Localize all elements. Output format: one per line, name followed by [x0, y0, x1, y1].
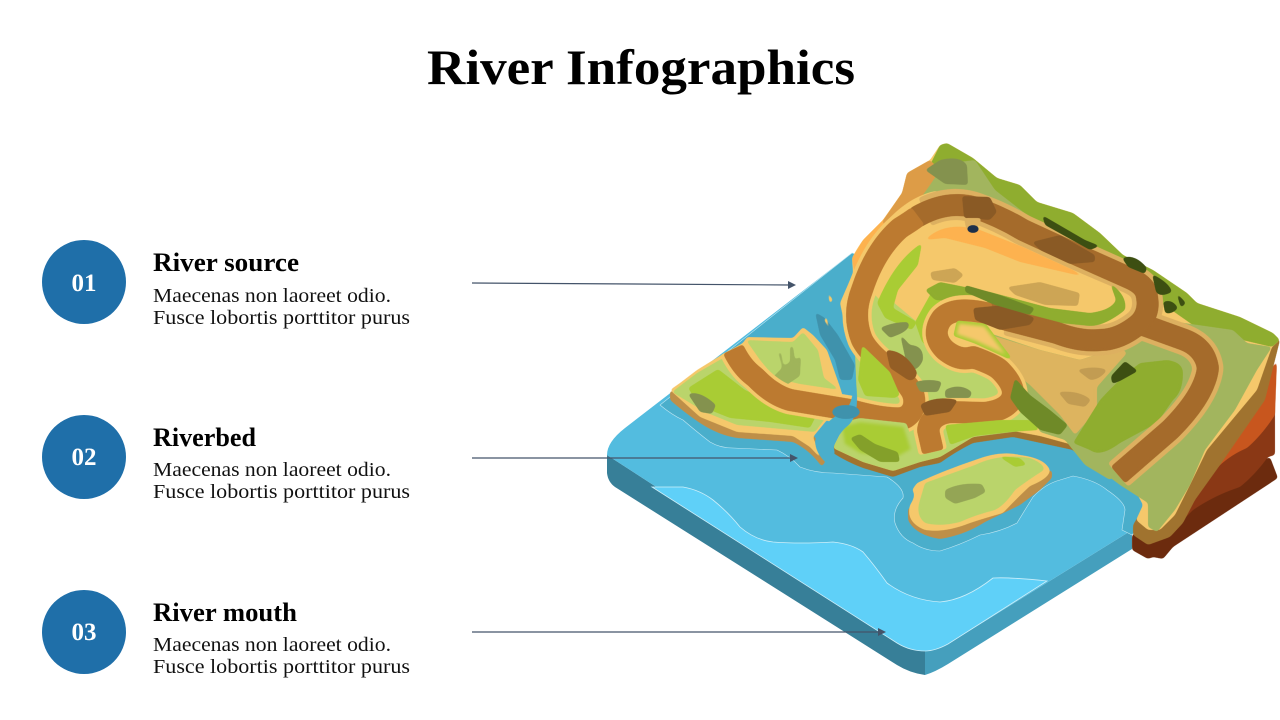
arrow: to river mouth: [472, 628, 886, 636]
shadow on upper band: [962, 196, 997, 220]
inlet dark branches: [815, 312, 855, 380]
description 03: [153, 634, 410, 678]
green grove in loop: [965, 285, 1035, 315]
shadow on inner S: [920, 398, 958, 416]
crossing shadow: [832, 405, 860, 419]
description 02: Maecenas non laoreet odio.: [153, 459, 391, 481]
bright field lower: [945, 420, 1040, 445]
grove on ridge: [1042, 215, 1100, 250]
dark tree 1: [1122, 257, 1147, 274]
dark green patch, upland: [925, 158, 968, 185]
land: left of river base: [670, 327, 847, 460]
left land: bright green: [688, 369, 818, 428]
bright green beside S band: [915, 286, 942, 350]
water block: left side wall: [607, 455, 925, 675]
tree trunk: [900, 334, 923, 370]
sink hole: [967, 225, 979, 233]
factory shaped shade: [772, 346, 801, 386]
island grass: [918, 457, 1044, 525]
river: [815, 360, 857, 466]
dark tree patch on green blob: [1111, 361, 1138, 384]
right olive field: [1100, 320, 1272, 532]
brown shadow on band: [886, 350, 917, 380]
light sea zone: [652, 487, 1047, 651]
shadow, upper loop right: [1032, 235, 1095, 264]
bright field by inlet: [840, 420, 913, 460]
number badge 02: 02: [72, 444, 96, 471]
description 03: Maecenas non laoreet odio.: [153, 634, 391, 656]
small grove middle 2: [945, 386, 972, 398]
orange slope: [852, 193, 925, 295]
dark tree 3: [1163, 301, 1178, 313]
tan blot in field 1: [1007, 282, 1080, 306]
tan edge: upper loop: [925, 204, 1148, 340]
brown band, far right: [1118, 322, 1208, 475]
upper tributary: [824, 290, 833, 335]
inner yellow field: [893, 229, 1119, 322]
shallow water around the shore: [660, 253, 1160, 551]
item 01: river source: [42, 240, 410, 329]
description 01: [153, 285, 410, 329]
tan blot in field 2: [930, 268, 964, 283]
land tan inside lower right: [980, 330, 1205, 480]
tan blot lower 2: [1058, 392, 1091, 407]
orange rock: [1205, 360, 1277, 480]
arrow: to riverbed: [472, 454, 798, 462]
heading: river mouth: River mouth: [153, 598, 298, 627]
ochre slope: [882, 160, 940, 232]
grove by tan lowland: [1010, 378, 1068, 435]
number badge 03: [42, 590, 126, 674]
arrow: to river source: [472, 281, 796, 289]
hollow on upper band: [964, 218, 982, 232]
description 01: Maecenas non laoreet odio.: [153, 285, 391, 307]
heading: riverbed: Riverbed: [153, 423, 257, 452]
upland olive field: [918, 160, 1040, 225]
river channel into the sea: [815, 290, 860, 466]
dark tree 4: [1176, 292, 1186, 308]
island grove: [945, 484, 986, 504]
left land: light green: [672, 358, 830, 432]
left land: plateau: [746, 332, 840, 390]
description 02: Fusce lobortis porttitor purus: [153, 481, 410, 503]
title: River Infographics: [427, 39, 855, 95]
description 02: [153, 459, 410, 503]
tan lowland: [975, 330, 1127, 435]
upland green: [930, 143, 1280, 347]
island bright patch: [998, 456, 1027, 467]
water surface: [607, 253, 1150, 651]
island sand rim: [909, 453, 1050, 531]
number badge 01: 01: [72, 270, 96, 297]
water block: right side wall: [925, 530, 1132, 675]
item 02: riverbed: [42, 415, 410, 503]
description 03: Fusce lobortis porttitor purus: [153, 656, 410, 678]
dark grove in bright field: [850, 434, 900, 462]
description 01: Fusce lobortis porttitor purus: [153, 307, 410, 329]
bright green inside loop: [877, 243, 922, 330]
land: main terrain base: [833, 143, 1280, 530]
brown band, upper loop: [915, 205, 1148, 340]
isometric river terrain illustration: [607, 143, 1280, 675]
brown band, lower left: [733, 216, 918, 418]
island: [908, 453, 1052, 539]
tan blot lower 1: [1077, 368, 1107, 380]
orange strip in yellow field: [925, 227, 1085, 277]
number badge 01: [42, 240, 126, 324]
small grove middle 1: [915, 380, 942, 392]
shore side wall, right: [832, 330, 1280, 545]
bedrock layers: [1132, 360, 1278, 559]
tree top, upper: [880, 322, 909, 338]
heading: river source: River source: [153, 248, 299, 277]
tan edge of right bands: [925, 204, 1208, 475]
small bright field in S bend: [955, 322, 1010, 358]
green blob: [1073, 360, 1183, 453]
island side wall: [908, 470, 1052, 539]
shadow, S top: [973, 305, 1035, 330]
number badge 02: [42, 415, 126, 499]
dark rock: [1132, 457, 1278, 559]
tan edge of inner S band: [928, 310, 1013, 452]
number badge 03: 03: [72, 619, 96, 646]
green strip in loop: [925, 282, 1125, 326]
left grove: [688, 393, 716, 414]
bright field mid left: [858, 345, 900, 398]
item 03: river mouth: [42, 590, 410, 678]
middle rock: [1173, 400, 1275, 530]
plains: bright green: [845, 278, 870, 350]
tan edge of lower left band: [733, 205, 940, 418]
plains: light green: [833, 290, 1050, 471]
tan edge: far band: [1118, 322, 1208, 475]
shore side wall, left: [670, 390, 826, 467]
dark tree 2: [1152, 274, 1172, 295]
tree shade group: [688, 158, 1186, 435]
brown band, inner S: [928, 310, 1013, 452]
